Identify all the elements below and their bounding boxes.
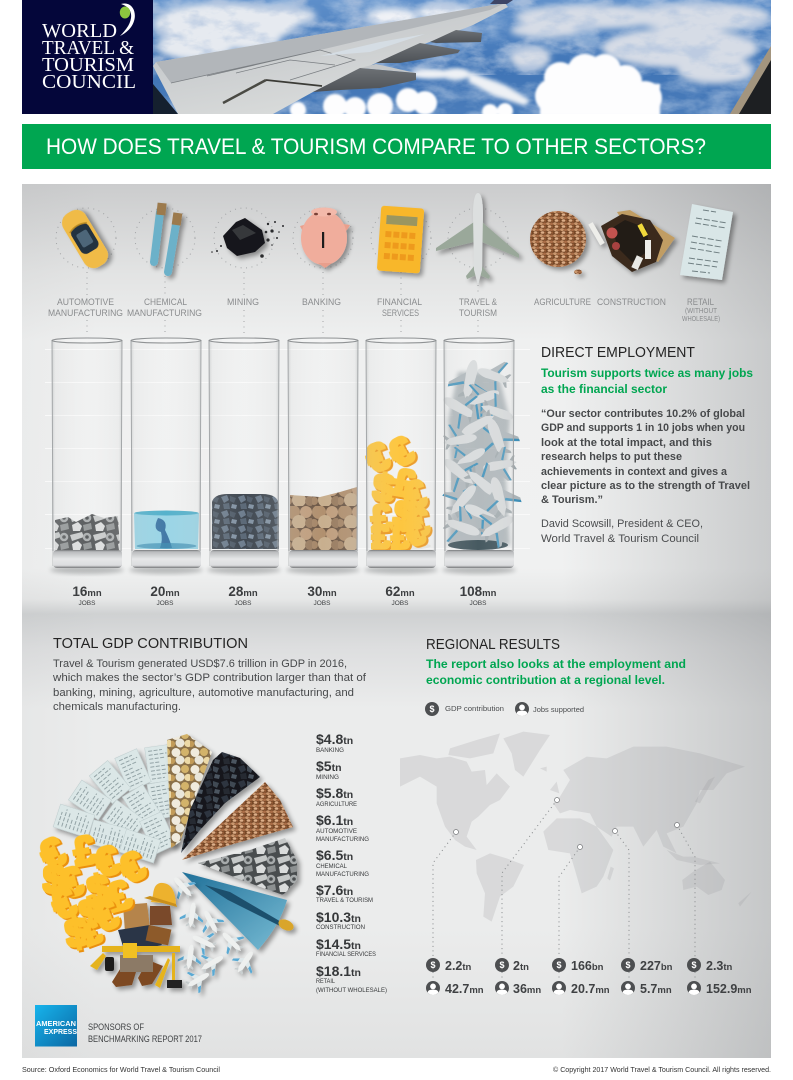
green subheading xyxy=(541,366,753,396)
regional stats: Africa: 20.7mn xyxy=(571,982,610,996)
attribution: World Travel & Tourism Council xyxy=(541,533,699,545)
wedge: financial services currency symbols: £ xyxy=(103,872,136,921)
list: GDP values by sector: $6.5tn xyxy=(316,847,353,863)
legend: Jobs supported xyxy=(533,705,584,714)
quote: look at the total impact, and this xyxy=(541,437,712,449)
regional stats: Africa: 166bn xyxy=(571,959,604,973)
icon: grains xyxy=(530,211,586,274)
quote: research helps to put these xyxy=(541,451,682,463)
regional stats: Asia Pacific: 152.9mn xyxy=(706,982,752,996)
logo wordmark: TOURISM xyxy=(42,54,134,76)
icon: handbag of construction tools xyxy=(588,210,675,272)
regional stats: Americas: 42.7mn xyxy=(445,982,484,996)
wedge: financial services currency symbols: € xyxy=(91,837,124,886)
green regional subheading xyxy=(426,657,686,687)
icon: aeroplane xyxy=(436,193,519,285)
attribution: David Scowsill, President & CEO, xyxy=(541,518,703,530)
wedge: mining coal xyxy=(181,752,260,853)
wedge: retail receipts xyxy=(53,745,177,863)
sector labels: WHOLESALE) xyxy=(682,316,720,323)
sector labels: FINANCIAL xyxy=(377,297,422,308)
regional stats: Africa: $ xyxy=(556,960,562,970)
wedge: financial services currency symbols: € xyxy=(55,858,88,907)
sector labels: MINING xyxy=(227,297,259,308)
text block: total GDP contribution xyxy=(52,636,367,713)
GDP description: which makes the sector’s GDP contribution larger than that of xyxy=(52,672,367,684)
sector labels xyxy=(48,297,720,323)
sector labels: RETAIL xyxy=(687,297,714,308)
list: GDP values by sector: TRAVEL & TOURISM xyxy=(316,897,373,904)
chart: glasses showing direct employment xyxy=(45,338,530,607)
attribution xyxy=(541,518,703,545)
list: GDP values by sector: CONSTRUCTION xyxy=(316,924,365,931)
glass: financial services, 62mn jobs: € xyxy=(404,501,432,546)
heading: total GDP contribution: TOTAL GDP CONTRIBUTION xyxy=(53,636,248,652)
glass: financial services, 62mn jobs: £ xyxy=(390,462,419,507)
quote: achievements in context and gives a xyxy=(541,466,728,478)
sector labels: MANUFACTURING xyxy=(127,308,202,319)
quote: clear picture as to the strength of Travel xyxy=(541,480,750,492)
sector labels: TOURISM xyxy=(459,308,497,319)
logo wordmark: COUNCIL xyxy=(42,71,136,93)
sector labels: CHEMICAL xyxy=(144,297,187,308)
source note: Source: Oxford Economics for World Travel & Tourism Council xyxy=(22,1065,220,1074)
regional stats: Asia Pacific: $ xyxy=(691,960,697,970)
list: GDP values by sector: $6.1tn xyxy=(316,812,353,828)
logo wordmark: WORLD xyxy=(42,20,117,42)
wedge: financial services currency symbols: € xyxy=(46,880,82,928)
main grey panel xyxy=(22,184,771,1058)
sponsor text: BENCHMARKING REPORT 2017 xyxy=(88,1034,202,1044)
GDP description xyxy=(52,658,367,713)
wedge: financial services currency symbols: $ xyxy=(43,858,65,902)
sector labels: AGRICULTURE xyxy=(534,297,591,308)
list: GDP values by sector xyxy=(316,731,387,994)
logo block xyxy=(22,0,153,114)
icon: calculator xyxy=(377,206,424,273)
list: GDP values by sector: (WITHOUT WHOLESALE) xyxy=(316,987,387,994)
list: GDP values by sector: RETAIL xyxy=(316,978,335,985)
glass: financial services, 62mn jobs: £ xyxy=(390,519,410,556)
list: GDP values by sector: $14.5tn xyxy=(316,936,361,952)
glass: financial services, 62mn jobs xyxy=(361,338,438,607)
quote: GDP and supports 1 in 10 jobs when you xyxy=(541,422,745,434)
list: GDP values by sector: MINING xyxy=(316,774,339,781)
glass: mining, 28mn jobs: 28mn xyxy=(228,584,258,599)
wedge: financial services currency symbols xyxy=(33,828,152,957)
icon: automotive car xyxy=(58,206,112,272)
list: GDP values by sector: $18.1tn xyxy=(316,963,361,979)
sector guide dotted lines xyxy=(56,208,508,336)
quote: & Tourism.” xyxy=(541,494,603,506)
list: GDP values by sector: AGRICULTURE xyxy=(316,801,358,808)
glass: financial services, 62mn jobs: $ xyxy=(371,467,396,511)
text block: regional results xyxy=(425,637,686,716)
glass: financial services, 62mn jobs: 62mn xyxy=(385,584,415,599)
icon: coal lump xyxy=(211,218,284,258)
list: GDP values by sector: $4.8tn xyxy=(316,731,353,747)
regional stats: Asia Pacific: 2.3tn xyxy=(706,959,733,973)
sector labels: MANUFACTURING xyxy=(48,308,123,319)
quote: “Our sector contributes 10.2% of global xyxy=(541,408,745,420)
photo: aeroplane wing above clouds xyxy=(153,0,771,120)
glass: mining, 28mn jobs xyxy=(207,338,281,607)
wedge: travel and tourism planes xyxy=(166,870,262,996)
title banner xyxy=(22,124,771,169)
wedge: financial services currency symbols: $ xyxy=(77,891,103,937)
regional stats: Europe xyxy=(495,958,541,996)
regional stats: Europe: 36mn xyxy=(513,982,541,996)
window frame xyxy=(730,46,771,114)
glass: financial services, 62mn jobs: € xyxy=(402,517,429,554)
wedge: agriculture grains xyxy=(182,782,293,860)
sector labels: (WITHOUT xyxy=(685,308,718,315)
regional stats: Europe: 2tn xyxy=(513,959,529,973)
glass: financial services, 62mn jobs: € xyxy=(399,473,431,519)
wing xyxy=(153,0,513,114)
glass: mining, 28mn jobs: JOBS xyxy=(235,600,252,607)
icon: piggy bank xyxy=(300,208,350,268)
GDP description: Travel & Tourism generated USD$7.6 trillion in GDP in 2016, xyxy=(53,658,347,670)
regional stats: Americas: 2.2tn xyxy=(445,959,472,973)
wedge: financial services currency symbols: € xyxy=(88,892,124,940)
legend: GDP contribution xyxy=(445,704,504,713)
logo wordmark xyxy=(42,20,136,93)
world map xyxy=(400,732,752,922)
sponsor: American Express logo: EXPRESS xyxy=(44,1027,77,1036)
glass: financial services, 62mn jobs: $ xyxy=(391,493,418,538)
sector labels: CONSTRUCTION xyxy=(597,297,666,308)
glass: automotive manufacturing, 16mn jobs xyxy=(50,338,124,607)
regional stats: Europe: $ xyxy=(499,960,505,970)
wedge: financial services currency symbols: £ xyxy=(79,916,106,953)
wedge: banking coins xyxy=(167,734,212,848)
legend: $ xyxy=(429,704,435,714)
sponsor text: SPONSORS OF xyxy=(88,1022,144,1032)
green regional subheading: economic contribution at a regional level. xyxy=(426,673,665,687)
glass: financial services, 62mn jobs: £ xyxy=(372,519,390,555)
chart: pie of sectors by GDP xyxy=(33,734,297,996)
glass: travel & tourism, 108mn jobs xyxy=(433,338,524,607)
list: GDP values by sector: MANUFACTURING xyxy=(316,871,369,878)
title banner: HOW DOES TRAVEL & TOURISM COMPARE TO OTHER SECTORS? xyxy=(46,134,706,159)
glass: financial services, 62mn jobs: £ xyxy=(369,497,394,541)
legend xyxy=(425,702,584,716)
list: GDP values by sector: $10.3tn xyxy=(316,909,361,925)
wedge: financial services currency symbols: € xyxy=(33,829,72,878)
sector labels: SERVICES xyxy=(382,308,419,319)
glass: chemical manufacturing, 20mn jobs xyxy=(129,338,203,607)
glass: automotive manufacturing, 16mn jobs: JOBS xyxy=(79,600,96,607)
wedge: automotive bolts xyxy=(198,838,297,895)
logo wordmark: TRAVEL & xyxy=(42,37,134,59)
icon: chemical test tubes xyxy=(154,203,182,272)
glass: chemical manufacturing, 20mn jobs: JOBS xyxy=(157,600,174,607)
glass: banking, 30mn jobs: JOBS xyxy=(314,600,331,607)
sponsor: American Express logo xyxy=(35,1005,77,1046)
green subheading: as the financial sector xyxy=(541,382,667,396)
regional stats: Middle East: 5.7mn xyxy=(640,982,672,996)
map location pointers xyxy=(433,798,695,981)
regional stats: Middle East: $ xyxy=(625,960,631,970)
regional stats: Middle East: 227bn xyxy=(640,959,673,973)
glass: financial services, 62mn jobs: € xyxy=(361,435,395,481)
list: GDP values by sector: $5.8tn xyxy=(316,785,353,801)
wedge: financial services currency symbols: $ xyxy=(84,867,113,914)
wedge: financial services currency symbols: € xyxy=(113,843,152,892)
regional stats: Americas xyxy=(426,958,484,996)
wedge: chemical blue liquid with dropper xyxy=(182,872,295,950)
wedge: construction worker xyxy=(90,883,182,988)
regional stats: Asia Pacific xyxy=(687,958,752,996)
icon: retail receipt xyxy=(680,204,733,280)
sector labels: TRAVEL & xyxy=(459,297,498,308)
GDP description: banking, mining, agriculture, automotive manufacturing, and xyxy=(53,687,354,699)
regional stats: Middle East xyxy=(621,958,673,996)
sponsor text xyxy=(88,1022,202,1044)
copyright note: © Copyright 2017 World Travel & Tourism Council. All rights reserved. xyxy=(553,1065,771,1074)
regional stats: Americas: $ xyxy=(430,960,436,970)
header: logo and aeroplane photo xyxy=(22,0,771,120)
sector labels: BANKING xyxy=(302,297,341,308)
glass: banking, 30mn jobs xyxy=(286,338,360,607)
wedge: financial services currency symbols: £ xyxy=(70,828,99,875)
list: GDP values by sector: CHEMICAL xyxy=(316,863,347,870)
list: GDP values by sector: FINANCIAL SERVICES xyxy=(316,951,377,958)
heading: regional results: REGIONAL RESULTS xyxy=(426,637,560,653)
glass: financial services, 62mn jobs: JOBS xyxy=(392,600,409,607)
list: GDP values by sector: $7.6tn xyxy=(316,882,353,898)
glass: automotive manufacturing, 16mn jobs: 16mn xyxy=(72,584,102,599)
wedge: financial services currency symbols: $ xyxy=(62,910,91,957)
glass: travel & tourism, 108mn jobs: JOBS xyxy=(470,600,487,607)
green subheading: Tourism supports twice as many jobs xyxy=(541,366,753,380)
logo mark xyxy=(120,3,135,36)
list: GDP values by sector: AUTOMOTIVE xyxy=(316,828,358,835)
list: GDP values by sector: BANKING xyxy=(316,747,344,754)
sector labels: AUTOMOTIVE xyxy=(57,297,114,308)
sponsor: American Express logo: AMERICAN xyxy=(36,1019,76,1028)
regional stats: Africa xyxy=(552,958,610,996)
list: GDP values by sector: $5tn xyxy=(316,758,342,774)
quote xyxy=(541,408,750,506)
GDP description: chemicals manufacturing. xyxy=(53,701,181,713)
glass: travel & tourism, 108mn jobs: 108mn xyxy=(460,584,497,599)
glass: banking, 30mn jobs: 30mn xyxy=(307,584,337,599)
text block: direct employment xyxy=(541,345,753,545)
list: GDP values by sector: MANUFACTURING xyxy=(316,836,369,843)
glass: financial services, 62mn jobs: € xyxy=(383,429,421,476)
heading: direct employment: DIRECT EMPLOYMENT xyxy=(541,345,695,361)
green regional subheading: The report also looks at the employment and xyxy=(426,657,686,671)
glass: chemical manufacturing, 20mn jobs: 20mn xyxy=(150,584,180,599)
